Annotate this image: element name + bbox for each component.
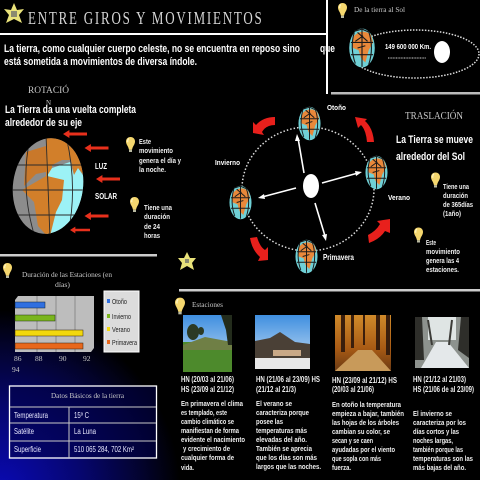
- chart title: Duración de las Estaciones (en: [22, 270, 112, 279]
- panel: translation: [215, 103, 473, 274]
- chart legend: Invierno: [112, 314, 131, 321]
- chart axis: 94: [12, 365, 20, 374]
- seasons heading: Estaciones: [192, 301, 223, 309]
- chart legend: Otoño: [112, 299, 127, 306]
- icon: bulb: [130, 197, 139, 212]
- chart title: [22, 270, 112, 289]
- chart axis: 92: [83, 354, 91, 363]
- autumn text: [332, 400, 404, 472]
- large globe: [12, 138, 84, 234]
- spring text: manifiestan de forma: [181, 426, 240, 435]
- season labels: Otoño: [327, 103, 346, 112]
- summer text: que los días son más: [256, 453, 317, 462]
- season labels: Invierno: [215, 158, 240, 167]
- summer dates: (21/12 al 21/3): [256, 385, 296, 394]
- translation note: duration: Tiene una: [443, 184, 469, 191]
- panel: distance to the sun: [338, 3, 479, 78]
- translation note: duration: (1año): [443, 211, 461, 218]
- season labels: Verano: [388, 193, 410, 202]
- spring dates: HN (20/03 al 21/06): [181, 375, 234, 384]
- autumn text: ayudadas por el viento: [332, 445, 395, 454]
- photo: winter: [415, 317, 469, 368]
- autumn dates: [332, 376, 397, 394]
- winter text: caracteriza por los: [413, 418, 466, 427]
- season labels: Primavera: [323, 253, 354, 262]
- rotation note: day and night: movimiento: [139, 148, 173, 155]
- spring text: evidente el nacimiento: [181, 435, 245, 444]
- winter text: más bajas del año.: [413, 463, 466, 472]
- earth: autumn: [298, 107, 321, 140]
- earth: [349, 29, 375, 67]
- spring text: En primavera el clima: [181, 399, 244, 408]
- intro text: La tierra, como cualquier cuerpo celeste, no se encuentra en reposo sino: [4, 43, 300, 55]
- rotation heading: ROTACIÓ: [28, 84, 69, 96]
- table rows: [14, 411, 134, 454]
- translation heading: TRASLACIÓN: [405, 110, 463, 122]
- rotation note: day and night: genera el día y: [139, 158, 181, 165]
- intro text: [4, 43, 335, 68]
- translation note: duration: de 365días: [443, 202, 473, 209]
- dividers: [0, 0, 480, 292]
- star icon middle: [178, 252, 196, 270]
- summer text: largos que las noches.: [256, 462, 321, 471]
- chart legend: Verano: [112, 327, 130, 334]
- photo: autumn: [335, 315, 391, 371]
- dotted orbit: [351, 30, 479, 78]
- icon: bulb: [175, 298, 185, 314]
- translation note: seasons: estaciones.: [426, 267, 459, 274]
- sun: [303, 174, 319, 198]
- rotation note: duration: horas: [144, 233, 160, 240]
- panel: basic earth data table: [10, 386, 156, 458]
- red arrow bottom left: [250, 237, 268, 261]
- photo: summer: [255, 315, 310, 369]
- summer dates: [256, 375, 320, 394]
- translation note: seasons: [426, 240, 460, 274]
- summer text: También se aprecia: [256, 444, 313, 453]
- light label: [95, 162, 117, 201]
- icon: bulb: [126, 137, 135, 152]
- icon: bulb: [3, 263, 12, 278]
- icon: bulb: [414, 228, 423, 242]
- rotation description: alrededor de su eje: [5, 117, 82, 129]
- rotation note: day and night: [139, 139, 181, 174]
- earth: spring: [295, 240, 318, 273]
- summer text: El verano se: [256, 399, 292, 408]
- summer text: elevadas del año.: [256, 435, 307, 444]
- rotation note: duration: Tiene una: [144, 205, 172, 212]
- winter text: también porque las: [413, 445, 463, 454]
- translation note: seasons: genera las 4: [426, 258, 459, 265]
- panel: season duration chart: [3, 263, 139, 374]
- earth: summer: [365, 156, 388, 189]
- season labels: [215, 103, 410, 262]
- table rows: La Luna: [74, 427, 96, 436]
- translation note: duration: duración: [443, 193, 468, 200]
- sunlight arrows: [63, 130, 120, 233]
- chart axis: 86: [14, 354, 22, 363]
- winter text: El invierno se: [413, 409, 452, 418]
- spring text: vida.: [181, 463, 194, 472]
- table rows: 15º C: [74, 411, 89, 420]
- table heading: Datos Básicos de la tierra: [51, 391, 125, 400]
- chart axis: [12, 354, 91, 374]
- translation description: [396, 134, 473, 163]
- summer text: temperaturas más: [256, 426, 307, 435]
- autumn text: empieza a bajar, también: [332, 409, 404, 418]
- summer dates: HN (21/06 al 23/09) HS: [256, 375, 320, 384]
- light label: SOLAR: [95, 192, 117, 201]
- chart axis: 90: [59, 354, 67, 363]
- autumn text: cambian su color, se: [332, 427, 390, 436]
- rotation note: duration: duración: [144, 214, 170, 221]
- autumn text: fuerza.: [332, 463, 351, 472]
- photo: spring: [183, 315, 232, 372]
- autumn text: En otoño la temperatura: [332, 400, 402, 409]
- dotted measure: [388, 57, 426, 59]
- chart axis: 88: [35, 354, 43, 363]
- rotation description: La Tierra da una vuelta completa: [5, 104, 137, 116]
- earth: winter: [229, 186, 252, 219]
- autumn text: secan y se caen: [332, 436, 373, 445]
- title: ENTRE GIROS Y MOVIMIENTOS: [28, 9, 264, 29]
- table rows: Superficie: [14, 445, 41, 454]
- distance value: 149 600 000 Km.: [385, 42, 431, 51]
- spring text: es templado, este: [181, 408, 227, 417]
- icon: bulb: [431, 172, 440, 188]
- table rows: Temperatura: [14, 411, 48, 420]
- autumn text: las hojas de los árboles: [332, 418, 399, 427]
- red arrow top left: [253, 117, 275, 135]
- summer text: [256, 399, 321, 471]
- red arrow top right: [355, 117, 374, 142]
- light label: LUZ: [95, 162, 107, 171]
- spring text: [181, 399, 245, 472]
- rotation note: duration: de 24: [144, 224, 160, 231]
- orbit: [242, 127, 374, 251]
- translation note: seasons: movimiento: [426, 249, 460, 256]
- rotation note: day and night: la noche.: [139, 167, 166, 174]
- spring text: cambio climático se: [181, 417, 234, 426]
- table rows: Satélite: [14, 427, 34, 436]
- intro text: está sometida a movimientos de diversa índole.: [4, 56, 197, 68]
- translation note: duration: [443, 184, 473, 218]
- spring text: y crecimiento de: [183, 444, 230, 453]
- chart legend: [104, 291, 139, 352]
- summer text: caracteriza porque: [256, 408, 309, 417]
- chart title: días): [55, 280, 71, 289]
- winter text: días cortos y las: [413, 427, 459, 436]
- rotation heading overflow letter: N: [46, 99, 51, 107]
- spring dates: HS (23/09 al 21/12): [181, 385, 234, 394]
- blue glow lower left: [0, 290, 190, 480]
- summer text: posee las: [256, 417, 283, 426]
- winter text: [413, 409, 473, 472]
- spring dates: [181, 375, 234, 394]
- chart legend: Primavera: [112, 340, 137, 347]
- distance heading: De la tierra al Sol: [354, 5, 405, 14]
- translation note: seasons: Este: [426, 240, 436, 247]
- panel: seasons: [175, 298, 474, 472]
- panel: rotation: [5, 84, 181, 240]
- autumn text: que sopla con más: [332, 454, 381, 463]
- sun: [434, 41, 450, 63]
- winter dates: [413, 375, 474, 394]
- autumn dates: HN (23/09 al 21/12) HS: [332, 376, 397, 385]
- intro text: que: [320, 43, 335, 55]
- spring text: cualquier forma de: [181, 453, 234, 462]
- rotation description: [5, 104, 137, 129]
- white rays: [258, 134, 362, 241]
- red arrow bottom right: [368, 219, 390, 243]
- star icon top: [4, 3, 24, 23]
- winter text: noches largas,: [413, 436, 453, 445]
- rotation note: duration: [144, 205, 172, 240]
- icon: bulb: [338, 3, 347, 18]
- bar chart: [15, 296, 94, 352]
- autumn dates: (20/03 al 21/06): [332, 385, 374, 394]
- rotation note: day and night: Este: [139, 139, 151, 146]
- table rows: 510 065 284, 702 Km²: [74, 445, 134, 454]
